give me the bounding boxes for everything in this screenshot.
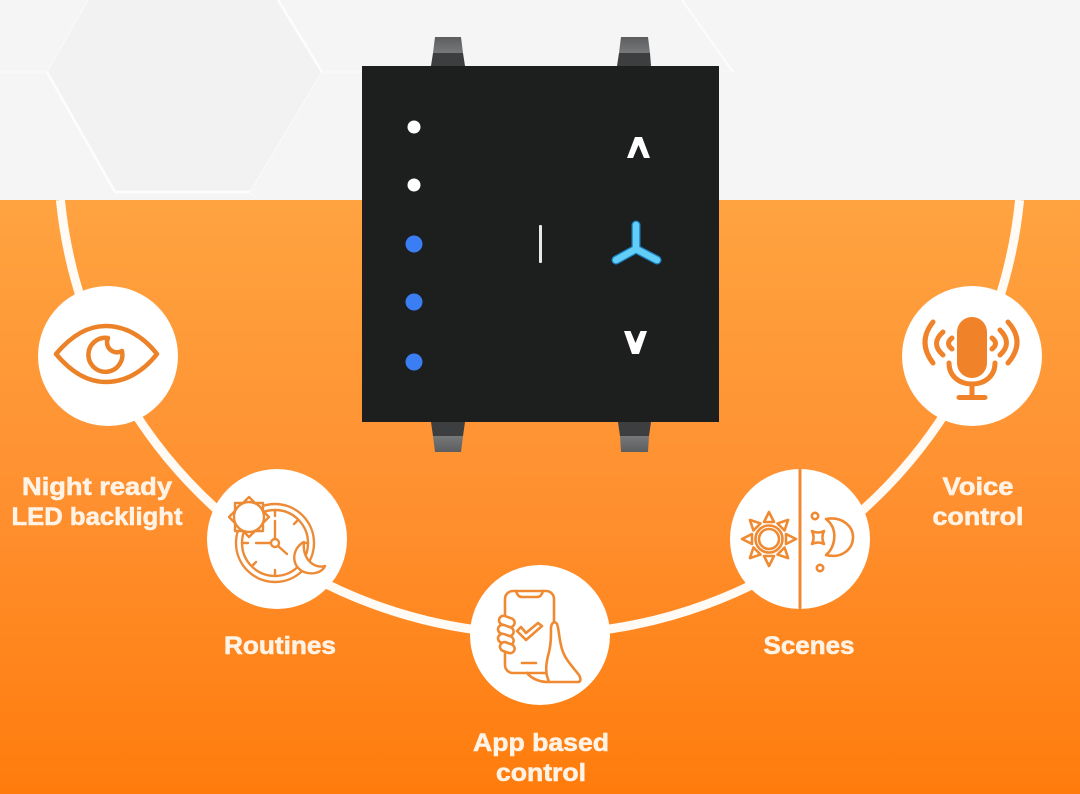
label bbox=[473, 729, 609, 787]
feature: night ready LED backlight bbox=[12, 286, 183, 531]
label: Routines bbox=[224, 632, 336, 660]
feature: scenes bbox=[730, 469, 870, 660]
icon: fan bbox=[616, 225, 657, 260]
feature: routines bbox=[207, 469, 347, 660]
label bbox=[932, 473, 1024, 531]
product: smart switch device bbox=[362, 37, 719, 452]
icon: up chevron bbox=[627, 137, 650, 158]
device face bbox=[362, 66, 719, 422]
bottom clips bbox=[431, 422, 651, 452]
label: App based bbox=[473, 729, 609, 757]
label: Night ready bbox=[22, 473, 172, 501]
feature: app based control bbox=[470, 565, 610, 787]
divider bbox=[798, 469, 802, 609]
orange background panel bbox=[0, 200, 1080, 794]
top clips bbox=[431, 37, 651, 66]
icon: microphone bbox=[925, 317, 1017, 398]
connecting arc bbox=[60, 200, 1020, 634]
label bbox=[12, 473, 183, 531]
label: control bbox=[932, 503, 1024, 531]
feature: voice control bbox=[902, 286, 1042, 531]
icon: clock with sun and moon bbox=[229, 497, 325, 582]
icon: eye bbox=[56, 326, 157, 382]
level indicator dots bbox=[406, 120, 422, 370]
label: Voice bbox=[942, 473, 1014, 501]
icon: down chevron bbox=[624, 331, 647, 354]
power line mark bbox=[539, 225, 542, 263]
background: hexagon tile wall bbox=[0, 0, 1080, 200]
label: control bbox=[496, 759, 586, 787]
icon: sun bbox=[742, 512, 796, 566]
icon: moon and stars bbox=[812, 513, 853, 571]
icon: hand holding phone bbox=[497, 591, 580, 682]
label: Scenes bbox=[764, 632, 854, 660]
label: LED backlight bbox=[12, 503, 183, 531]
